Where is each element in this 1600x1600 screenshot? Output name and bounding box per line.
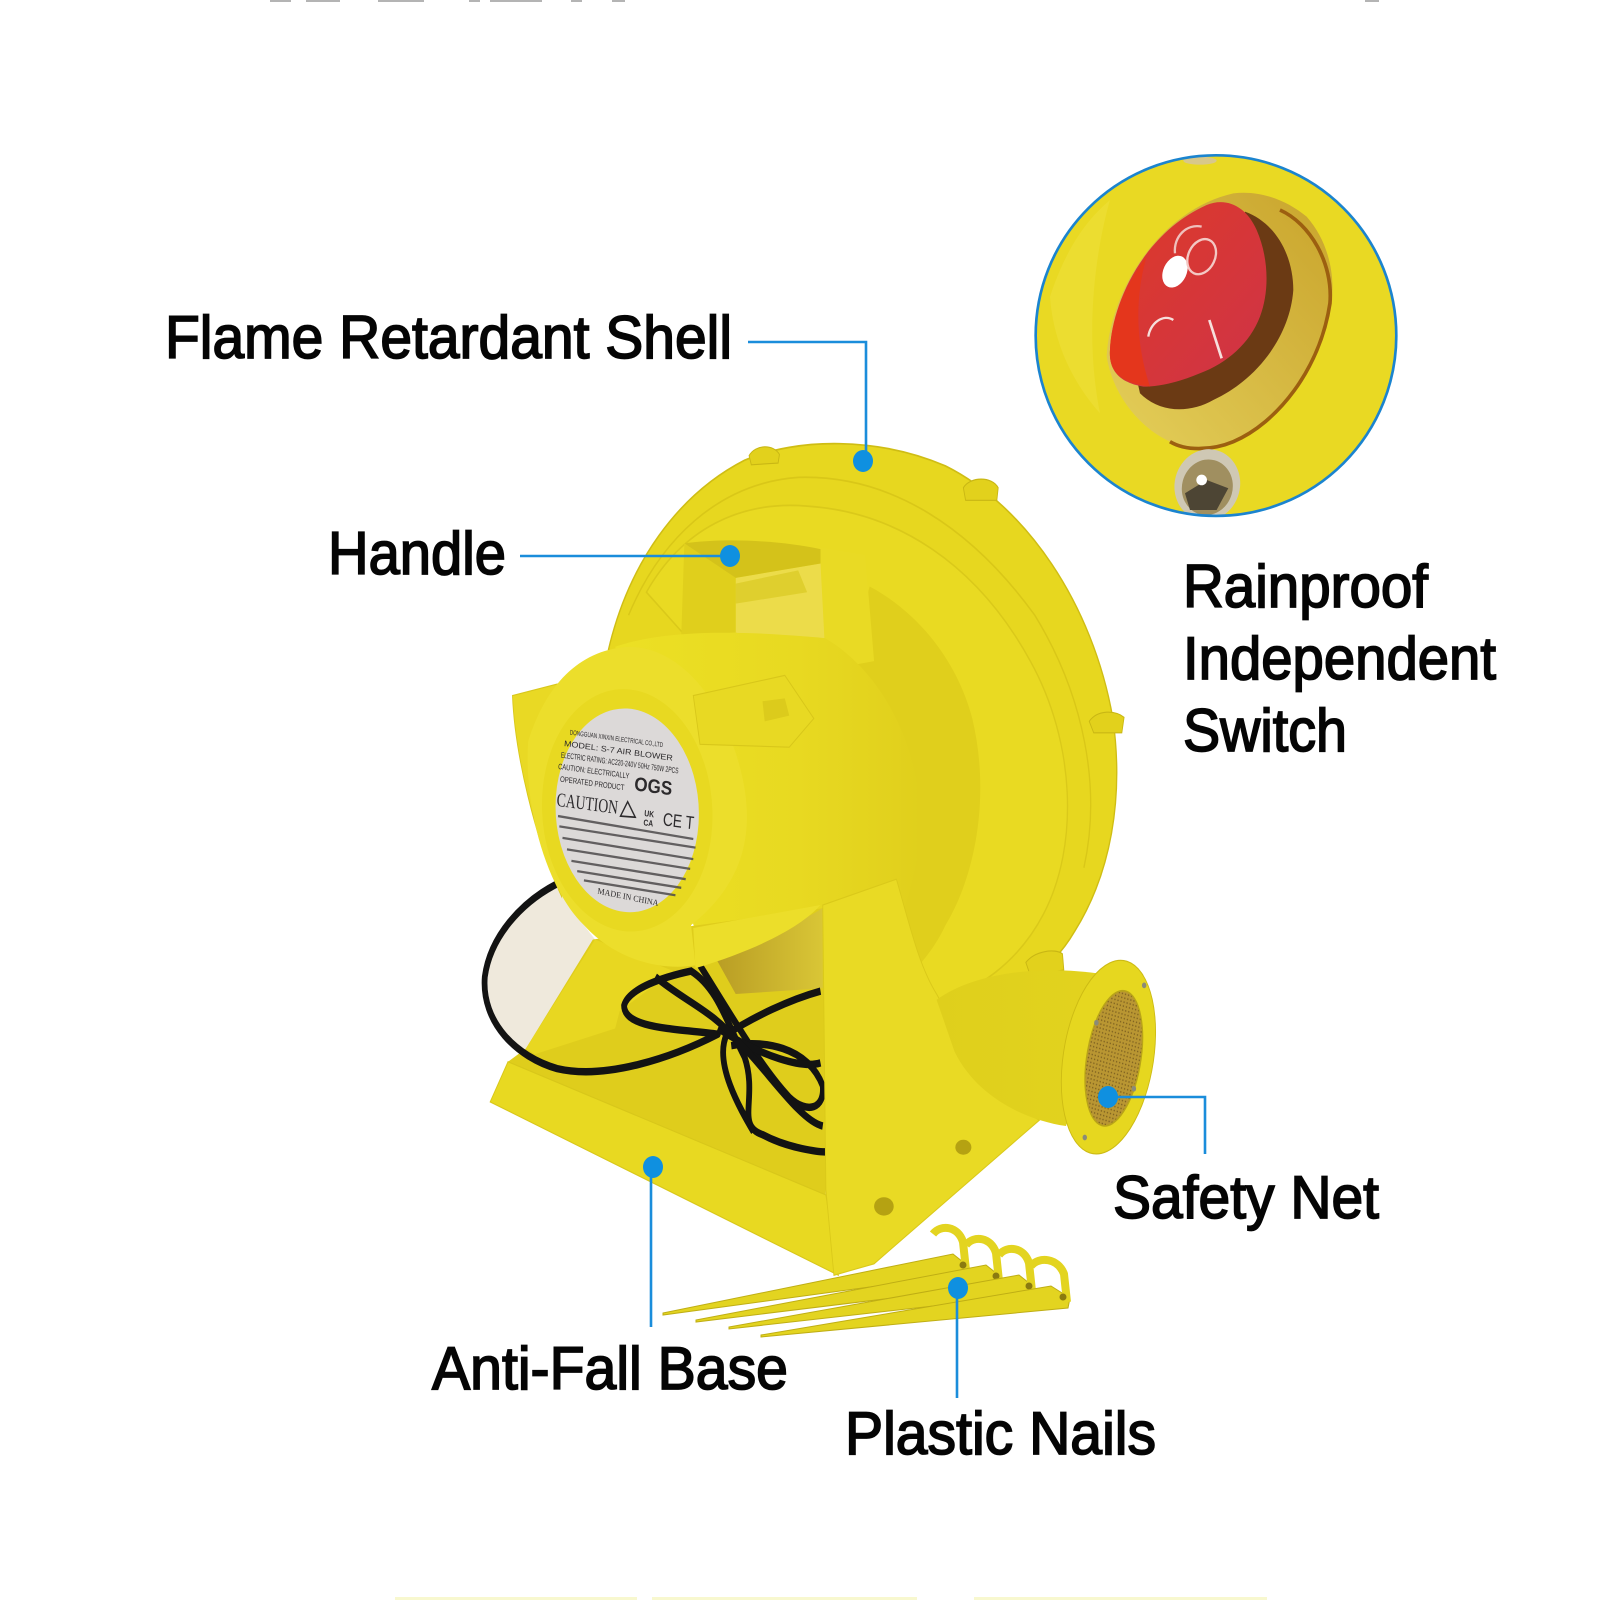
beige gap behind cable [488,888,595,1050]
stake 2 [696,1239,1001,1322]
callout: anti-fall base: Anti-Fall Base [432,1335,788,1402]
warning label: CAUTION: ELECTRICALLY [558,761,630,781]
callout: rainproof independent switch [1183,553,1496,764]
A-frame support with mounting holes [823,879,1039,1275]
outlet flange with safety net [1047,947,1170,1167]
warning label: CE T [662,810,695,834]
callout: plastic nails [845,1277,1156,1467]
base plate [490,1062,838,1275]
callout: rainproof independent switch: Switch [1183,697,1347,764]
callout: safety net: Safety Net [1113,1164,1379,1231]
callout: safety net [1098,1086,1379,1231]
warning label: CAUTION [556,788,619,818]
callout: handle: Handle [328,520,506,587]
callout: flame retardant shell: Flame Retardant Shell [165,304,732,371]
cropped heading remnant at top edge [270,0,1379,2]
warning label: OGS [634,772,673,800]
warning label: UK [644,808,655,820]
callout: flame retardant shell [165,304,873,472]
warning label: DONGGUAN XINXIN ELECTRICAL CO.,LTD [569,729,664,749]
warning label [543,694,711,927]
inset: rainproof switch close-up [1033,153,1400,528]
air blower product illustration [485,444,1170,1275]
base floor and ramp [508,908,826,1195]
stake 1 [663,1228,968,1315]
callout: handle [328,520,740,587]
motor cylinder [615,633,921,948]
fan housing shell [608,444,1124,1005]
power cable and coil [485,884,825,1152]
carry handle [681,540,874,670]
stake 4 [761,1260,1070,1337]
callout: plastic nails: Plastic Nails [845,1400,1156,1467]
warning label: CA [643,817,654,829]
warning label: MADE IN CHINA [597,886,660,908]
callout: rainproof independent switch: Rainproof [1183,553,1428,620]
warning label: OPERATED PRODUCT [560,774,625,793]
outlet tube [937,970,1102,1126]
callout: anti-fall base [432,1156,788,1402]
warning label: MODEL: S-7 AIR BLOWER [564,738,673,763]
stake 3 [729,1249,1034,1329]
plastic stakes [663,1228,1070,1337]
cropped image remnant at bottom edge [395,1597,1267,1600]
motor end cap [512,647,821,968]
warning label: ELECTRIC RATING: AC220-240V 50Hz 750W 2PCS [561,750,679,776]
callout: rainproof independent switch: Independent [1183,625,1496,692]
